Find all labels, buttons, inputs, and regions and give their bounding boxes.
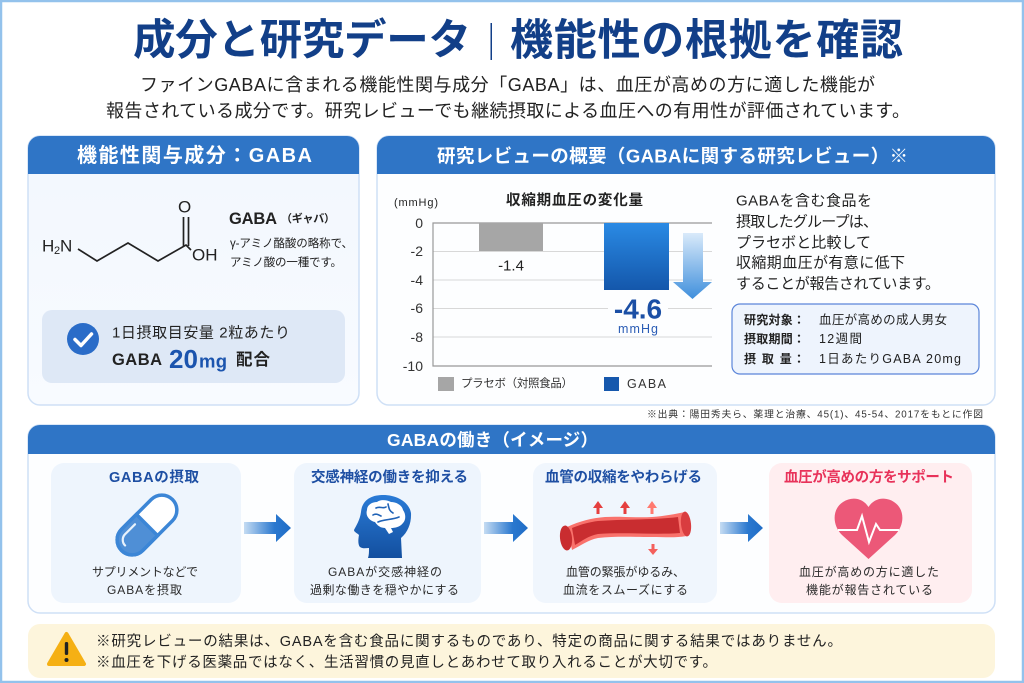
step 2: sympathetic nerve: 交感神経の働きを抑える	[311, 468, 468, 486]
bar chart: systolic blood pressure change	[394, 191, 712, 391]
intro text	[106, 75, 910, 121]
GABA description: アミノ酸の一種です。	[230, 255, 342, 269]
GABA value: mmHg	[618, 322, 658, 336]
intro text: ファインGABAに含まれる機能性関与成分「GABA」は、血圧が高めの方に適した機能が	[140, 75, 875, 95]
panel header: 研究レビューの概要（GABAに関する研究レビュー）※	[437, 146, 908, 166]
GABA description: GABA	[229, 210, 277, 228]
icon: expansion arrows	[593, 501, 658, 555]
GABA value: -4.6	[614, 294, 662, 324]
bar chart: systolic blood pressure change: (mmHg)	[394, 197, 438, 209]
daily intake box: mg	[199, 350, 227, 372]
step 3: blood vessel	[533, 463, 717, 603]
study details box: 血圧が高めの成人男女	[819, 312, 947, 327]
panel: functional ingredient GABA	[28, 136, 359, 405]
panel header: GABAの働き（イメージ）	[387, 430, 598, 450]
review finding text: 収縮期血圧が有意に低下	[736, 254, 905, 272]
icon: capsule	[111, 489, 183, 561]
chemical structure of GABA	[42, 198, 218, 264]
intro text: 報告されている成分です。研究レビューでも継続摂取による血圧への有用性が評価されています。	[106, 101, 910, 121]
icon: head with brain	[354, 495, 411, 558]
icon: heart with pulse	[835, 499, 902, 559]
caution notice: ※血圧を下げる医薬品ではなく、生活習慣の見直しとあわせて取り入れることが大切です。	[96, 653, 717, 671]
bar chart: systolic blood pressure change: -8	[411, 329, 423, 345]
step 4: support	[769, 463, 972, 603]
GABA value	[608, 294, 668, 336]
title: 機能性の根拠を確認	[510, 17, 903, 65]
review finding text	[736, 192, 940, 292]
step 4: support: 血圧が高めの方に適した	[799, 564, 939, 579]
chemical structure of GABA: N	[60, 236, 72, 256]
study details box: 研究対象：	[744, 312, 805, 327]
study details box	[732, 304, 979, 374]
panel: how GABA works	[28, 425, 995, 613]
icon: blood vessel	[559, 511, 692, 551]
review finding text: プラセボと比較して	[736, 234, 871, 252]
step 2: sympathetic nerve	[294, 463, 481, 603]
panel header: 機能性関与成分：GABA	[77, 143, 312, 167]
step 4: support: 血圧が高めの方をサポート	[784, 468, 954, 486]
panel header	[377, 136, 995, 174]
chemical structure of GABA: H	[42, 236, 54, 256]
step 1: intake: サプリメントなどで	[92, 565, 198, 579]
bar chart: systolic blood pressure change: -6	[411, 300, 423, 316]
GABA description: （ギャバ）	[281, 212, 335, 225]
chemical structure of GABA: O	[178, 198, 191, 216]
caution notice: ※研究レビューの結果は、GABAを含む食品に関するものであり、特定の商品に関する結果ではありません。	[96, 633, 842, 650]
daily intake box: 1日摂取目安量 2粒あたり	[112, 324, 290, 342]
review finding text: することが報告されています。	[736, 276, 940, 292]
daily intake box: 配合	[236, 350, 270, 369]
review finding text: GABAを含む食品を	[736, 192, 872, 210]
daily intake box	[42, 310, 345, 383]
legend	[438, 377, 667, 391]
chemical structure of GABA: 2	[54, 245, 60, 257]
source note: ※出典：陽田秀夫ら、薬理と治療、45(1)、45-54、2017をもとに作図	[647, 408, 983, 420]
legend: プラセボ（対照食品）	[461, 377, 573, 390]
bar chart: systolic blood pressure change: -4	[411, 272, 423, 288]
panel: research review overview	[377, 136, 995, 405]
icon: warning triangle	[49, 634, 84, 664]
bar: placebo	[479, 223, 543, 251]
study details box: 摂 取 量：	[744, 351, 805, 366]
bar chart: systolic blood pressure change: 0	[415, 215, 423, 231]
review finding text: 摂取したグループは、	[736, 214, 878, 230]
bar chart: systolic blood pressure change: 収縮期血圧の変化量	[506, 191, 643, 209]
caution notice	[28, 624, 995, 678]
step 3: blood vessel: 血管の緊張がゆるみ、	[566, 564, 685, 579]
legend: GABA	[627, 377, 667, 391]
step 2: sympathetic nerve: 過剰な働きを穏やかにする	[310, 583, 459, 597]
arrow 1	[244, 514, 291, 542]
study details box: 12週間	[819, 332, 862, 346]
panel header	[28, 425, 995, 454]
icon: check mark	[67, 323, 99, 355]
study details box: 摂取期間：	[744, 331, 805, 346]
GABA description	[229, 210, 353, 269]
step 3: blood vessel: 血流をスムーズにする	[563, 582, 688, 597]
title: 成分と研究データ	[133, 16, 471, 64]
arrow 2	[484, 514, 528, 542]
step 4: support: 機能が報告されている	[806, 582, 933, 597]
bar chart: systolic blood pressure change: -2	[411, 243, 423, 259]
daily intake box: GABA	[112, 351, 162, 369]
step 1: intake: GABAの摂取	[109, 469, 200, 486]
bar chart: systolic blood pressure change: -1.4	[498, 258, 524, 274]
daily intake box: 20	[169, 344, 198, 374]
bar: GABA	[604, 223, 669, 290]
step 3: blood vessel: 血管の収縮をやわらげる	[545, 468, 702, 486]
study details box: 1日あたりGABA 20mg	[819, 352, 961, 366]
title	[133, 16, 903, 65]
down arrow	[673, 233, 712, 299]
step 2: sympathetic nerve: GABAが交感神経の	[328, 564, 442, 579]
GABA description: γ-アミノ酪酸の略称で、	[230, 236, 353, 250]
bar chart: systolic blood pressure change: -10	[403, 358, 423, 374]
step 1: intake	[51, 463, 241, 603]
arrow 3	[720, 514, 763, 542]
panel header	[28, 136, 359, 174]
chemical structure of GABA: OH	[192, 246, 218, 264]
step 1: intake: GABAを摂取	[107, 582, 182, 597]
